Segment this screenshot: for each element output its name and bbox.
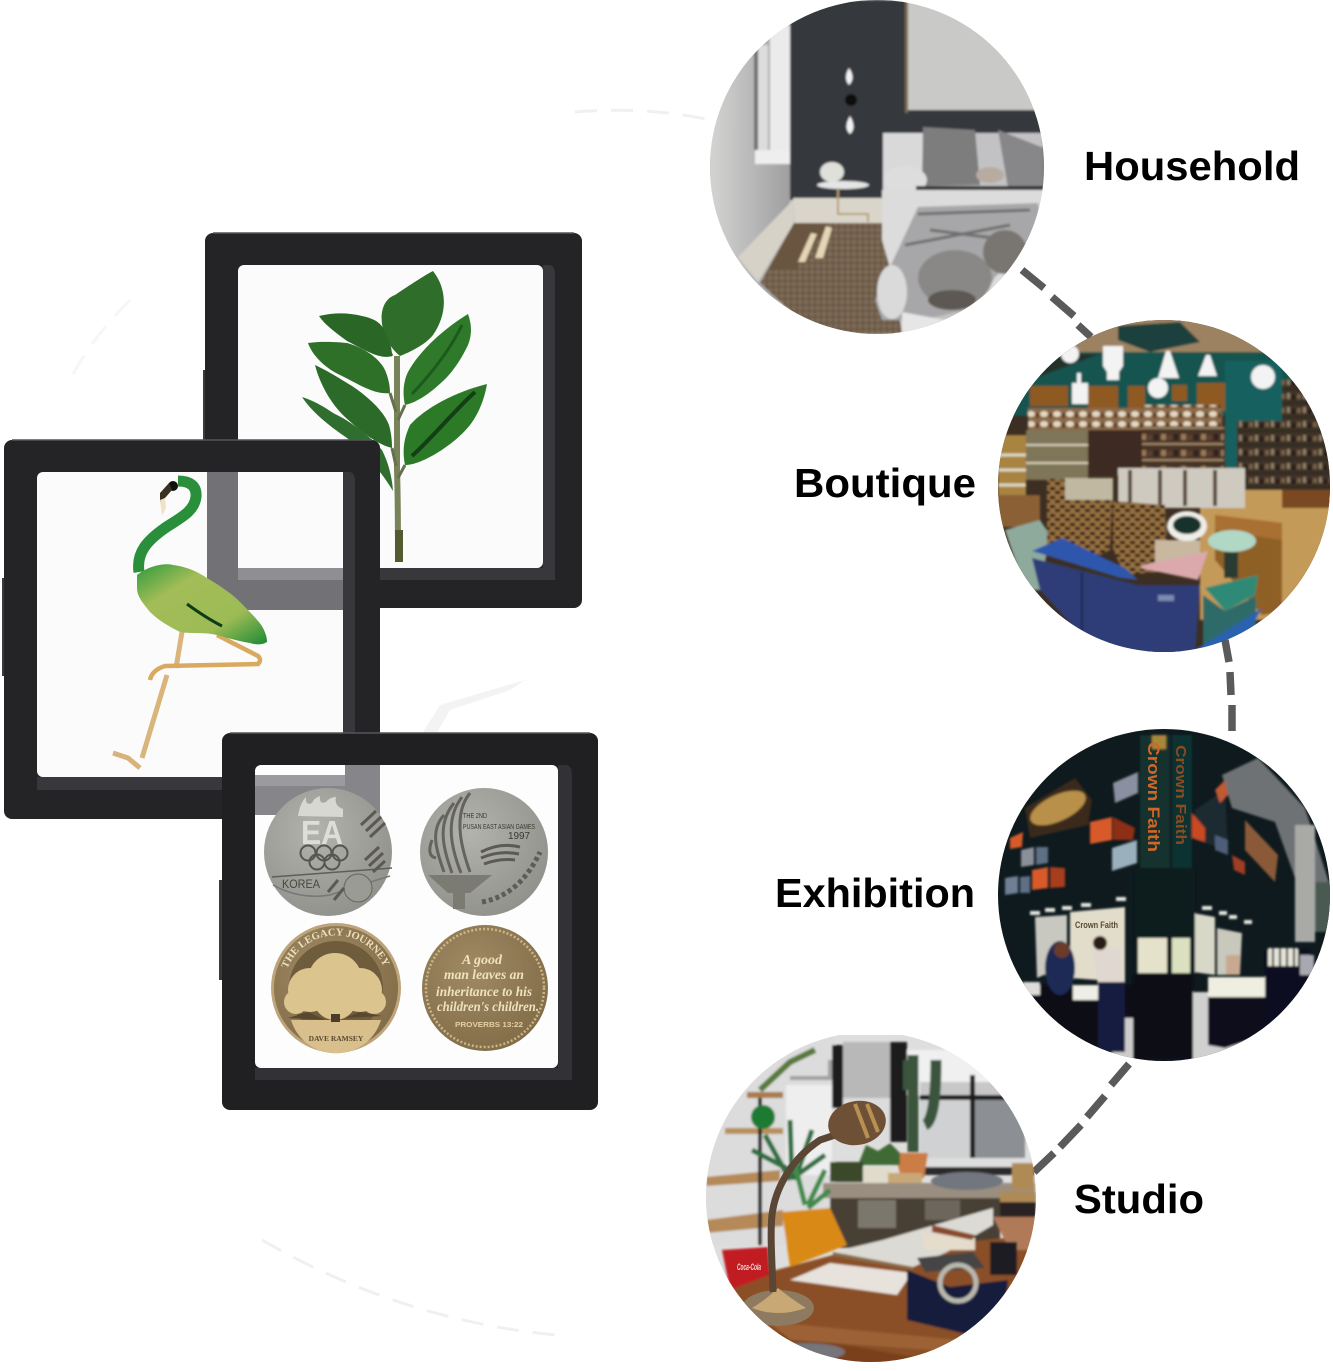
photo: boutique shop interior <box>995 318 1333 658</box>
photo: household bedroom <box>700 0 1050 340</box>
coin: inheritance proverb medal: inheritance to his <box>436 985 533 1000</box>
illustration: green leaf sprig <box>302 271 487 562</box>
coin: silver Pusan games medal: THE 2ND <box>463 811 487 820</box>
frame: flamingo display <box>2 440 380 819</box>
coin: Legacy Journey tree medal <box>271 923 401 1054</box>
coin: silver Pusan games medal <box>420 788 548 916</box>
coin: Legacy Journey tree medal: DAVE RAMSEY <box>309 1034 364 1043</box>
decorative: pale glare shard <box>415 680 525 745</box>
background: faint dashed ring <box>70 110 715 1335</box>
see-through: middle frame seen through window <box>255 765 380 815</box>
coin: inheritance proverb medal: children's children. <box>437 1000 539 1015</box>
connector: dashed line between circles <box>1022 270 1232 1172</box>
photo: studio workspace <box>700 1035 1040 1370</box>
see-through: rear frame seen through window <box>207 472 343 610</box>
illustration: brass gooseneck lamp <box>742 1096 889 1326</box>
label: Crown Faith sign on column side: Crown Faith <box>1172 745 1189 845</box>
coin: silver EA Korea medal <box>264 788 392 916</box>
label: Coca-Cola crate marking: Coca-Cola <box>737 1262 761 1272</box>
label: Studio: Studio <box>1074 1176 1204 1222</box>
coin: silver EA Korea medal: KOREA <box>282 879 320 891</box>
coin: inheritance proverb medal: A good <box>461 953 503 968</box>
frame: leaf display <box>203 233 582 608</box>
label: Boutique: Boutique <box>794 460 976 506</box>
frame: coin display <box>219 732 598 1110</box>
coin: Legacy Journey tree medal: THE LEGACY JOURNEY <box>281 928 390 968</box>
photo: exhibition stand <box>995 725 1333 1065</box>
label: Household: Household <box>1084 143 1300 189</box>
label: Exhibition: Exhibition <box>775 870 975 916</box>
coin: silver EA Korea medal: EA <box>301 814 343 851</box>
coin: inheritance proverb medal <box>422 925 548 1051</box>
illustration: green flamingo brooch <box>113 481 267 768</box>
coin: inheritance proverb medal: man leaves an <box>444 968 524 983</box>
coin: silver Pusan games medal: PUSAN EAST ASIAN GAMES <box>463 822 535 831</box>
label: Crown Faith shop window sign: Crown Faith <box>1075 920 1118 930</box>
coin: inheritance proverb medal: PROVERBS 13:22 <box>455 1020 523 1029</box>
label: Crown Faith sign on column: Crown Faith <box>1144 742 1163 852</box>
coin: silver Pusan games medal: 1997 <box>508 831 530 842</box>
